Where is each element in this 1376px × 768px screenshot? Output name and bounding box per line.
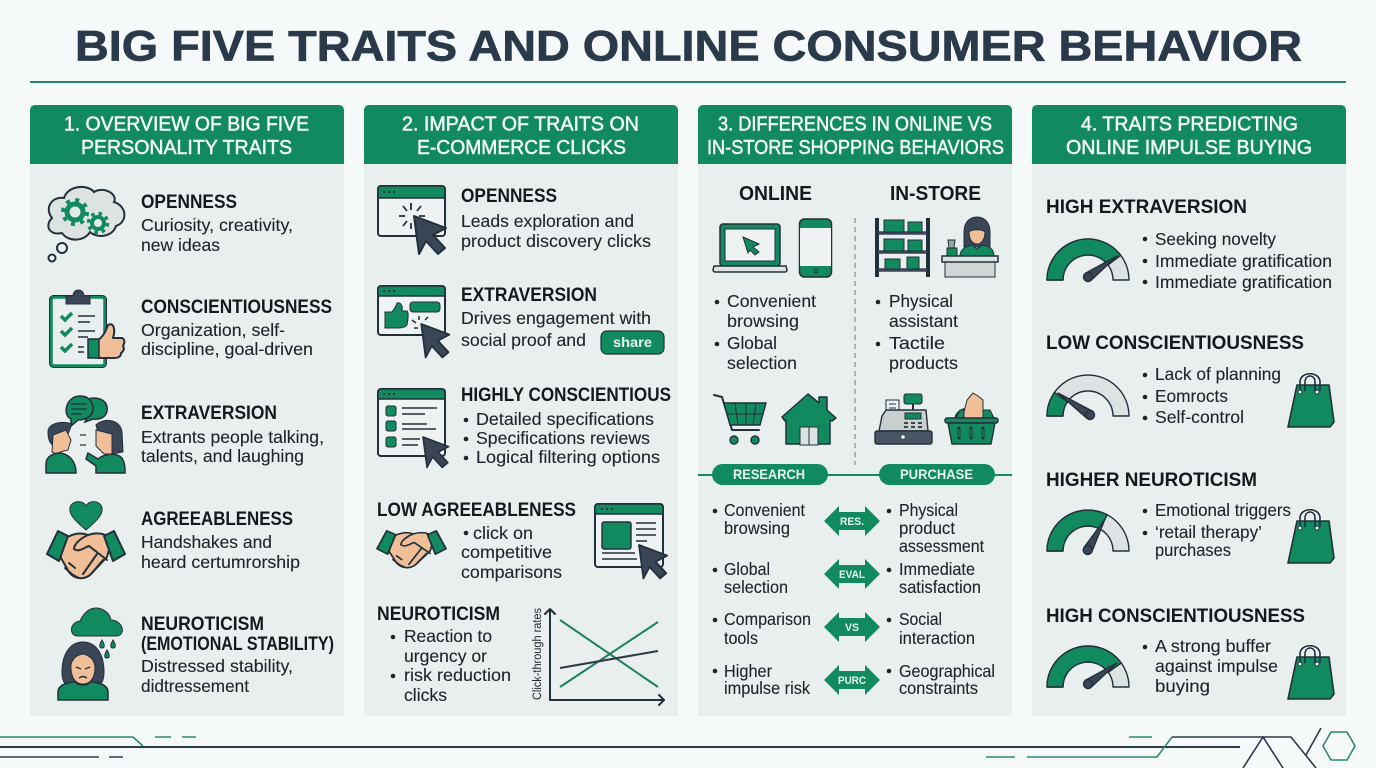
text: low agreeableness: comparisons (461, 562, 562, 582)
heading: panel 3: 3. DIFFERENCES IN ONLINE VS (718, 114, 992, 136)
arrow: VS: VS (845, 622, 859, 634)
panel: differences in online vs in-store shopping (698, 105, 1012, 716)
text: purchase list: constraints (899, 678, 978, 698)
text: research list: Comparison (724, 609, 811, 629)
icon: clipboard with thumbs up (50, 290, 124, 368)
panel: impact of traits on e-commerce clicks (364, 105, 678, 716)
icon: store shelves (877, 218, 928, 277)
icon: heart and handshake (47, 502, 125, 578)
text: neuroticism bullets (1143, 500, 1291, 560)
text: purchase list: Immediate (899, 559, 975, 579)
icon: cashier at counter (942, 217, 998, 277)
text: research list: Convenient (724, 500, 805, 520)
text: openness: new ideas (141, 235, 220, 255)
text: research list: Global (724, 559, 770, 579)
text: extraversion bullets: Seeking novelty (1155, 229, 1276, 249)
text: openness clicks: Leads exploration and (461, 211, 634, 231)
text: extraversion: Extrants people talking, (141, 427, 324, 447)
heading: panel 4: 4. TRAITS PREDICTING (1081, 114, 1298, 136)
icon: smartphone (800, 219, 832, 277)
text: neuroticism clicks (377, 604, 511, 705)
panel: traits predicting online impulse buying (1032, 105, 1346, 716)
text: neuroticism bullets: ‘retail therapy’ (1155, 522, 1262, 542)
text: in-store list: Physical (889, 291, 953, 311)
heading: low conscientiousness: LOW CONSCIENTIOUSNESS (1046, 333, 1304, 354)
text: research list: browsing (724, 518, 790, 538)
text: openness clicks: OPENNESS (461, 186, 557, 207)
text: high conscientiousness bullets: A strong buffer (1155, 636, 1271, 656)
text: conscientiousness: Organization, self- (141, 320, 285, 340)
text: research list: impulse risk (724, 678, 810, 698)
text: neuroticism clicks: NEUROTICISM (377, 604, 500, 625)
text: in-store list: products (889, 353, 958, 373)
heading: panel 3 (698, 105, 1012, 164)
share button: share (613, 334, 652, 350)
text: neuroticism bullets: Emotional triggers (1155, 500, 1291, 520)
icon: cash register (875, 394, 932, 444)
arrow: EVAL: EVAL (839, 569, 865, 581)
share button (601, 331, 664, 354)
text: extraversion bullets: Immediate gratification (1155, 272, 1332, 292)
icon: two people talking (46, 396, 125, 473)
arrow: RES. (824, 506, 880, 536)
gauge: low conscientiousness (1047, 375, 1129, 420)
text: high conscientiousness bullets: buying (1155, 676, 1210, 696)
column heading: online: ONLINE (739, 183, 812, 205)
icon: browser with list (378, 389, 449, 467)
heading: higher neuroticism: HIGHER NEUROTICISM (1046, 470, 1257, 491)
text: neuroticism clicks: urgency or (404, 646, 487, 666)
line chart: click-through rates: Click-through rates (532, 608, 544, 700)
pill: research (712, 464, 828, 485)
icon: laptop (713, 224, 787, 272)
heading: panel 2: E-COMMERCE CLICKS (417, 137, 626, 159)
text: online list: browsing (727, 311, 799, 331)
text: online list (715, 291, 816, 373)
heading: panel 2 (364, 105, 678, 164)
text: low agreeableness: LOW AGREEABLENESS (377, 500, 576, 521)
text: highly conscientious: Specifications reviews (476, 428, 650, 448)
text: research list: Higher (724, 661, 772, 681)
text: neuroticism clicks: Reaction to (404, 626, 492, 646)
line chart: click-through rates (532, 608, 664, 705)
text: conscientiousness: CONSCIENTIOUSNESS (141, 297, 332, 318)
text: extraversion clicks: Drives engagement with (461, 308, 651, 328)
arrow: RES.: RES. (840, 516, 864, 528)
text: conscientiousness (141, 297, 332, 359)
gauge: high extraversion (1047, 239, 1129, 282)
text: online list: Convenient (727, 291, 816, 311)
text: highly conscientious: HIGHLY CONSCIENTIOUS (461, 385, 671, 406)
text: purchase list: interaction (899, 628, 975, 648)
text: low agreeableness: click on (473, 523, 533, 543)
text: agreeableness: AGREEABLENESS (141, 509, 293, 530)
heading: high conscientiousness: HIGH CONSCIENTIOUSNESS (1046, 606, 1305, 627)
heading: high extraversion: HIGH EXTRAVERSION (1046, 197, 1247, 218)
arrow: EVAL (824, 559, 880, 589)
icon: shopping bag (1288, 510, 1334, 563)
text: online list: Global (727, 333, 777, 353)
text: in-store list: Tactile (889, 333, 945, 353)
text: openness: Curiosity, creativity, (141, 215, 293, 235)
text: extraversion (141, 403, 324, 466)
text: openness (141, 192, 293, 255)
text: in-store list: assistant (889, 311, 958, 331)
text: agreeableness: heard certumrorship (141, 552, 300, 572)
text: extraversion: EXTRAVERSION (141, 403, 277, 424)
text: neuroticism: didtressement (141, 676, 249, 696)
text: neuroticism: NEUROTICISM (141, 614, 264, 635)
heading: panel 1: PERSONALITY TRAITS (81, 137, 292, 159)
icon: thought cloud with gears (48, 187, 124, 262)
text: agreeableness: Handshakes and (141, 532, 272, 552)
text: purchase list: Social (899, 609, 942, 629)
icon: rain cloud over sad person (58, 608, 122, 700)
heading: panel 4 (1032, 105, 1346, 164)
text: neuroticism (141, 614, 334, 696)
pill: purchase: PURCHASE (900, 466, 973, 482)
text: extraversion bullets (1143, 229, 1332, 292)
icon: browser with comparison content (595, 504, 667, 578)
text: extraversion: talents, and laughing (141, 446, 304, 466)
arrow: PURC (824, 665, 880, 695)
text: conscientiousness: discipline, goal-driven (141, 339, 313, 359)
text: research list (713, 500, 811, 698)
icon: house (782, 394, 836, 445)
text: neuroticism: (EMOTIONAL STABILITY) (141, 634, 334, 655)
gauge: high conscientiousness (1047, 646, 1129, 688)
text: low conscientiousness bullets: Eomrocts (1155, 386, 1228, 406)
text: purchase list: Geographical (899, 661, 995, 681)
pill: purchase (879, 464, 995, 485)
text: high conscientiousness bullets: against impulse (1155, 656, 1278, 676)
text: extraversion clicks: social proof and (461, 330, 586, 350)
arrow: PURC: PURC (838, 675, 866, 687)
gauge: higher neuroticism (1047, 510, 1129, 554)
text: high conscientiousness bullets (1143, 636, 1278, 696)
text: low agreeableness: competitive (461, 542, 552, 562)
text: low conscientiousness bullets: Lack of planning (1155, 364, 1281, 384)
text: in-store list (876, 291, 958, 373)
text: research list: selection (724, 577, 788, 597)
icon: shopping bag (1288, 374, 1334, 427)
text: online list: selection (727, 353, 797, 373)
icon: browser with thumbs up (378, 286, 449, 357)
title: BIG FIVE TRAITS AND ONLINE CONSUMER BEHAVIOR (75, 22, 1302, 70)
column heading: in-store: IN-STORE (890, 183, 981, 205)
text: low conscientiousness bullets: Self-control (1155, 407, 1244, 427)
text: purchase list: product (899, 518, 955, 538)
text: neuroticism clicks: risk reduction (404, 665, 511, 685)
text: purchase list (887, 500, 995, 698)
text: purchase list: satisfaction (899, 577, 981, 597)
text: extraversion clicks: EXTRAVERSION (461, 285, 597, 306)
heading: panel 1 (30, 105, 344, 164)
text: neuroticism bullets: purchases (1155, 540, 1231, 560)
text: openness: OPENNESS (141, 192, 237, 213)
heading: panel 1: 1. OVERVIEW OF BIG FIVE (64, 114, 309, 136)
text: purchase list: Physical (899, 500, 958, 520)
text: neuroticism clicks: clicks (404, 685, 447, 705)
text: openness clicks: product discovery clicks (461, 231, 651, 251)
text: purchase list: assessment (899, 536, 984, 556)
icon: shopping bag (1288, 646, 1334, 699)
heading: panel 4: ONLINE IMPULSE BUYING (1066, 137, 1312, 159)
text: extraversion clicks (461, 285, 651, 350)
text: highly conscientious (461, 385, 671, 467)
text: low conscientiousness bullets (1143, 364, 1281, 427)
text: extraversion bullets: Immediate gratification (1155, 251, 1332, 271)
arrow: VS (824, 612, 880, 642)
text: low agreeableness (377, 500, 576, 582)
heading: panel 3: IN-STORE SHOPPING BEHAVIORS (707, 137, 1004, 159)
icon: shopping basket (945, 393, 998, 444)
text: neuroticism: Distressed stability, (141, 656, 293, 676)
icon: shopping cart (714, 395, 766, 444)
text: highly conscientious: Detailed specifications (476, 409, 654, 429)
text: research list: tools (724, 628, 758, 648)
text: agreeableness (141, 509, 300, 572)
heading: panel 2: 2. IMPACT OF TRAITS ON (402, 114, 639, 136)
panel: overview of Big Five personality traits (30, 105, 344, 716)
icon: small handshake (377, 531, 446, 568)
icon: browser with click cursor (378, 186, 446, 254)
text: highly conscientious: Logical filtering options (476, 447, 660, 467)
text: openness clicks (461, 186, 651, 251)
pill: research: RESEARCH (733, 466, 805, 482)
